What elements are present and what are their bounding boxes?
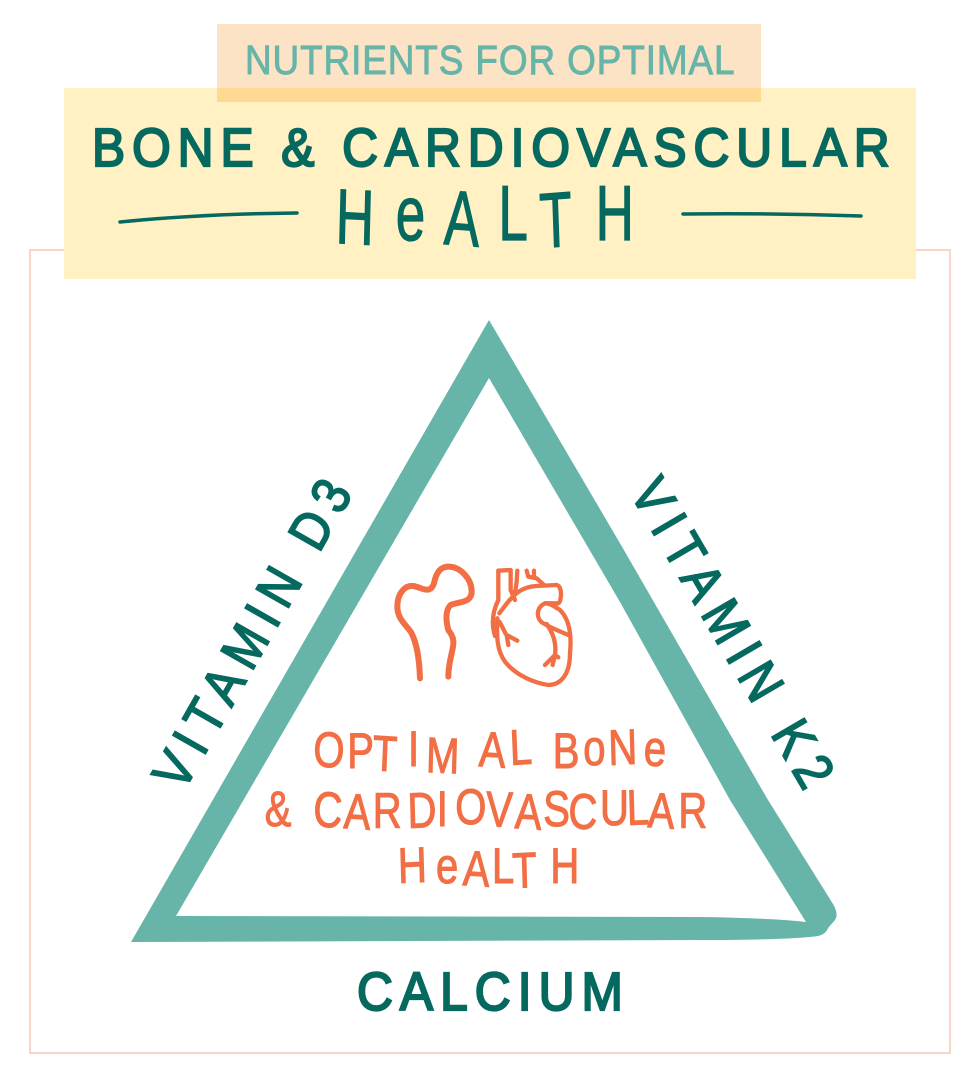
icon: femur bone <box>397 567 472 678</box>
page frame <box>30 250 950 1053</box>
line 1: OPTIMAL BoNe <box>312 718 667 784</box>
line 2: & CARDIOVASCULAR <box>265 779 707 841</box>
line 3: HeALTH <box>397 836 579 899</box>
text: optimal bone and cardiovascular health <box>265 718 707 899</box>
header banner: yellow title panel <box>64 88 916 279</box>
teal triangle <box>131 320 837 942</box>
label text: nutrients for optimal: NUTRIENTS FOR OPTIMAL <box>245 38 735 83</box>
label: vitamin k2: VITAMIN K2 <box>619 467 847 798</box>
label: calcium: CALCIUM <box>357 961 623 1021</box>
title: bone and cardiovascular: BONE & CARDIOVASCULAR <box>92 117 890 177</box>
right flourish line <box>683 214 861 216</box>
title: handwritten health: HeALTH <box>335 171 634 266</box>
header banner: peach label <box>217 24 761 102</box>
icon: anatomical heart <box>493 570 571 685</box>
left flourish line <box>120 213 297 222</box>
label: vitamin d3: VITAMIN D3 <box>141 469 364 799</box>
